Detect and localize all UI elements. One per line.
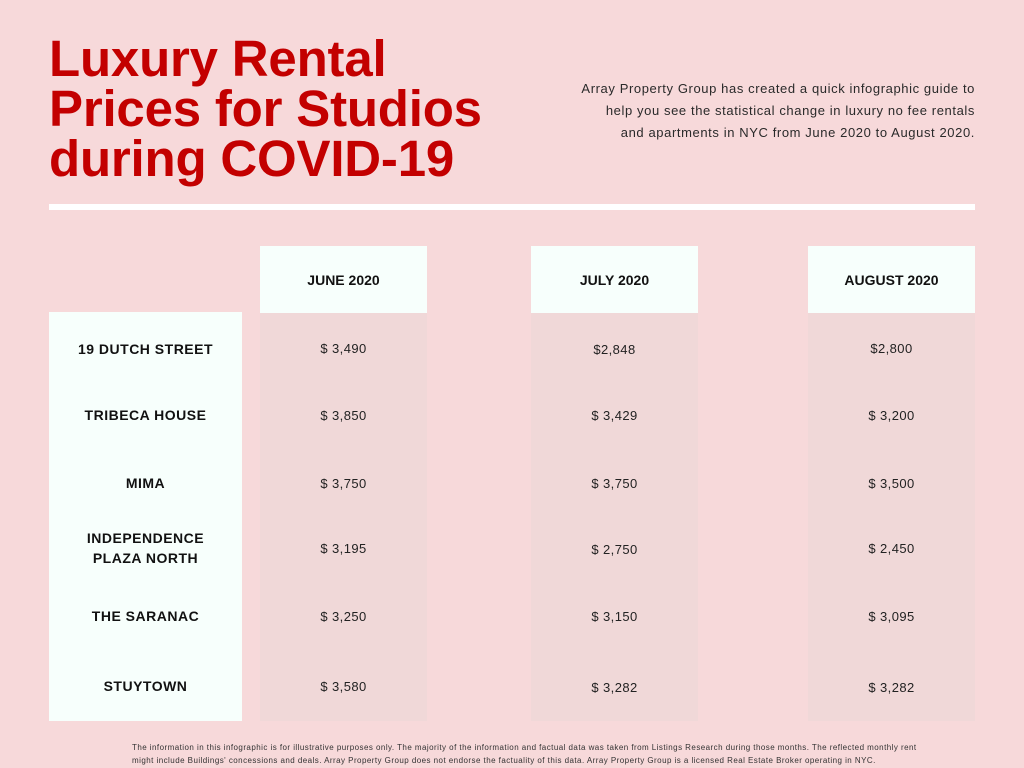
footer disclaimer: might include Buildings' concessions and deals. Array Property Group does not endorse the factuality of this data. Array Property Group is a licensed Real Estate Broker operating in NYC. xyxy=(132,756,876,765)
footer disclaimer xyxy=(132,743,917,765)
title: Luxury Rental xyxy=(49,30,386,87)
header: august xyxy=(808,246,975,313)
column: july values xyxy=(531,313,698,721)
panel: building names: MIMA xyxy=(126,475,165,491)
panel: building names: PLAZA NORTH xyxy=(93,550,198,566)
column: june values: $ 3,750 xyxy=(320,476,367,491)
column: july values: $ 3,429 xyxy=(591,408,638,423)
panel: building names: THE SARANAC xyxy=(92,608,199,624)
header: july: JULY 2020 xyxy=(580,272,649,288)
column: june values: $ 3,195 xyxy=(320,541,367,556)
panel: building names: TRIBECA HOUSE xyxy=(85,407,206,423)
title: Prices for Studios xyxy=(49,80,482,137)
column: july values: $ 2,750 xyxy=(591,542,638,557)
column: june values: $ 3,850 xyxy=(320,408,367,423)
panel: building names: STUYTOWN xyxy=(104,678,187,694)
panel: building names: 19 DUTCH STREET xyxy=(78,341,213,357)
column: august values: $ 3,095 xyxy=(868,609,915,624)
description: and apartments in NYC from June 2020 to August 2020. xyxy=(621,125,975,140)
column: june values: $ 3,250 xyxy=(320,609,367,624)
column: august values: $ 2,450 xyxy=(868,541,915,556)
column: june values: $ 3,490 xyxy=(320,341,367,356)
column: august values: $ 3,200 xyxy=(868,408,915,423)
column: august values: $ 3,500 xyxy=(868,476,915,491)
column: august values xyxy=(808,313,975,721)
header: june: JUNE 2020 xyxy=(307,272,380,288)
header: august: AUGUST 2020 xyxy=(844,272,939,288)
description: help you see the statistical change in luxury no fee rentals xyxy=(606,103,975,118)
description: Array Property Group has created a quick infographic guide to xyxy=(581,81,975,96)
panel: building names xyxy=(49,312,242,721)
column: august values: $2,800 xyxy=(870,341,913,356)
title: during COVID-19 xyxy=(49,130,454,187)
panel: building names: INDEPENDENCE xyxy=(87,530,204,546)
column: june values: $ 3,580 xyxy=(320,679,367,694)
column: august values: $ 3,282 xyxy=(868,680,915,695)
header: june xyxy=(260,246,427,313)
column: june values xyxy=(260,313,427,721)
column: july values: $2,848 xyxy=(593,342,636,357)
column: july values: $ 3,282 xyxy=(591,680,638,695)
description xyxy=(581,81,975,140)
header: july xyxy=(531,246,698,313)
title xyxy=(49,30,482,187)
column: july values: $ 3,750 xyxy=(591,476,638,491)
footer disclaimer: The information in this infographic is for illustrative purposes only. The majority of the information and factual data was taken from Listings Research during those months. The reflected monthly rent xyxy=(132,743,917,752)
column: july values: $ 3,150 xyxy=(591,609,638,624)
